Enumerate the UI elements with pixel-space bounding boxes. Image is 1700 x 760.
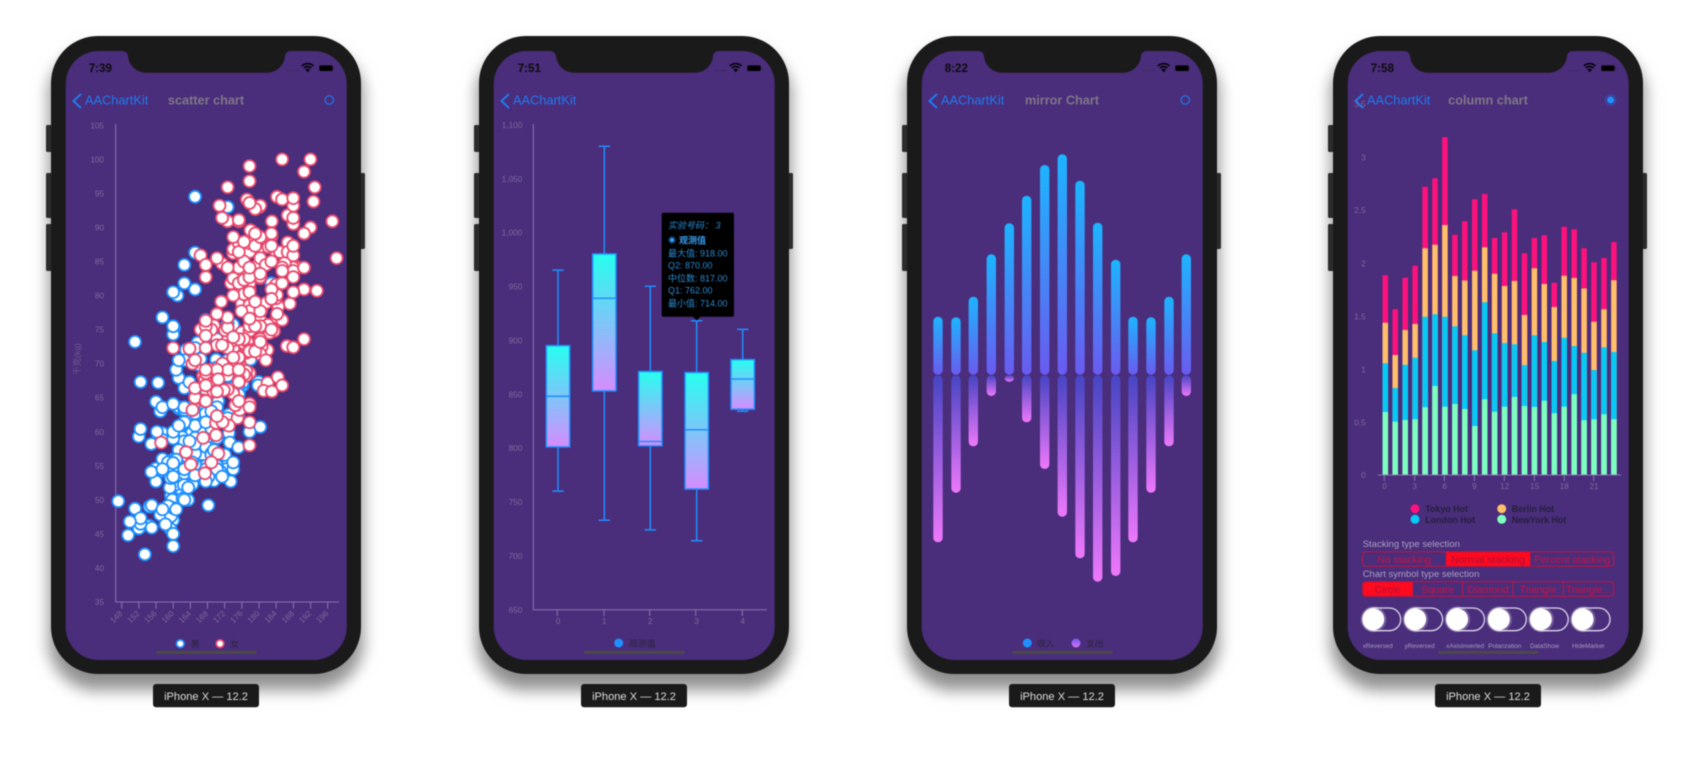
column x-axis [1378,475,1621,481]
status time 4: 7:58 [1371,62,1394,75]
column x-axis labels: 18 [1560,482,1569,491]
series: Berlin Hot [1385,225,1614,475]
segmented control: symbol: Square [1421,585,1455,596]
scatter x-axis labels: 160 [160,609,176,625]
segmented control: stacking: Normal stacking [1451,555,1525,566]
boxplot y-axis labels: 650 [509,606,523,615]
series: NewYork Hot [1385,386,1614,475]
toggle labels: xReversed [1363,643,1393,650]
scatter y-axis labels: 60 [95,428,104,437]
scatter y-axis labels: 105 [90,121,104,130]
boxplot y-axis labels: 900 [509,337,523,346]
phone 3: mirror chart [883,26,1241,712]
mirror legend [1023,638,1104,648]
phone 4: column chart [1309,26,1667,712]
tooltip: 中位数: 817.00 [668,272,728,284]
scatter y-axis title: 千克(kg) [72,343,82,375]
heading: stacking type: Stacking type selection [1363,539,1460,550]
tooltip: 最大值: 918.00 [668,248,728,258]
boxplot x-axis labels [556,617,745,626]
column y-axis labels [1354,100,1366,480]
heading: symbol type: Chart symbol type selection [1363,569,1479,580]
mirror legend: 收入 [1037,638,1055,648]
segmented control: symbol [1363,582,1614,596]
scatter y-axis labels: 70 [95,360,104,369]
scatter x-axis labels: 156 [143,609,159,625]
mirror upper bars [933,154,1191,375]
column x-axis labels [1382,482,1599,491]
column x-axis labels: 9 [1472,482,1477,491]
device frame 4 [1309,26,1667,712]
boxplot x-axis labels: 2 [648,617,653,626]
boxplot y-axis labels: 1,000 [502,229,523,238]
nav radio icon 3 [1181,96,1190,104]
boxplot y-axis labels: 950 [509,283,523,292]
scatter legend: 男 [191,639,200,649]
box 0 [546,270,570,491]
scatter axes [116,124,339,609]
tooltip: 实验号码： 3 [668,220,721,230]
toggle labels [1363,643,1605,650]
column x-axis labels: 21 [1589,482,1599,491]
column legend: NewYork Hot [1512,515,1566,525]
nav back label 3: AAChartKit [941,92,1005,107]
scatter series: blue points [112,191,277,560]
column y-axis labels: 1.5 [1354,313,1366,322]
scatter y-axis labels: 95 [95,189,104,198]
column legend: London Hot [1425,515,1475,525]
series: Tokyo Hot [1385,137,1614,475]
scatter x-axis labels: 176 [229,609,245,625]
scatter x-axis labels: 192 [297,609,314,625]
boxplot legend [614,638,656,648]
column y-axis labels: 2.5 [1354,206,1366,215]
scatter y-axis labels: 90 [95,224,104,232]
scatter y-axis labels: 75 [95,326,104,335]
device tag 4: iPhone X — 12.2 [1446,691,1530,703]
scatter legend: 女 [230,638,239,649]
segmented control: stacking: Percent stacking [1534,555,1610,566]
scatter y-axis labels: 55 [95,462,104,471]
boxplot x-axis labels: 3 [694,617,699,626]
scatter x-axis labels: 184 [263,609,279,625]
phone 2: box plot [455,26,813,712]
scatter y-axis labels: 80 [95,292,104,301]
nav back label 1: AAChartKit [85,92,149,107]
scatter y-axis labels: 50 [95,496,104,505]
column y-axis labels: 1 [1361,365,1366,374]
boxplot y-axis labels: 850 [509,391,523,400]
scatter series: red points [155,153,343,479]
boxplot axes [533,124,767,616]
stacked columns [1385,137,1614,475]
device tag 2: iPhone X — 12.2 [592,691,676,703]
tooltip [662,213,734,320]
tooltip: Q1: 762.00 [668,286,713,296]
column x-axis labels: 3 [1412,482,1417,491]
device frame 3 [883,26,1241,712]
nav radio icon 4 [1606,95,1616,105]
column x-axis labels: 0 [1382,482,1387,491]
column x-axis labels: 12 [1500,482,1510,491]
device tag 1 [153,684,259,707]
status time 2: 7:51 [518,62,541,75]
scatter y-axis labels: 85 [95,258,104,266]
device tag 2 [581,684,687,707]
box 1 [593,146,616,520]
segmented control: symbol: Triangle [1520,585,1557,596]
toggle labels: yReversed [1405,643,1435,650]
scatter y-axis labels: 40 [95,564,104,573]
box series [546,146,754,541]
box 2 [639,286,662,530]
device tag 4 [1435,684,1541,707]
segmented control: stacking [1363,552,1614,566]
device frame 2 [455,26,813,712]
scatter legend [176,638,239,649]
column y-axis labels: 0 [1361,471,1366,480]
tooltip: Q2: 870.00 [668,260,713,270]
phone 1: scatter chart [27,26,385,712]
boxplot y-axis labels [502,121,523,615]
column x-axis labels: 6 [1442,482,1447,491]
scatter y-axis labels: 35 [95,598,104,607]
segmented control: symbol: Diamond [1467,585,1509,596]
boxplot legend: 观测值 [629,638,656,648]
column legend: Tokyo Hot [1425,504,1468,514]
boxplot y-axis labels: 1,050 [502,175,523,184]
nav back label 4: AAChartKit [1367,92,1431,107]
nav title 4: column chart [1448,93,1529,107]
status time 3: 8:22 [945,62,968,75]
box 4 [731,329,754,411]
scatter x-axis labels: 148 [108,609,125,625]
scatter x-axis labels: 172 [211,609,228,625]
boxplot y-axis labels: 750 [509,498,523,507]
boxplot y-axis labels: 700 [509,552,523,561]
series: London Hot [1385,302,1614,475]
nav title 1: scatter chart [168,93,245,107]
scatter y-axis labels: 65 [95,394,104,403]
scatter x-axis labels: 152 [126,609,142,625]
nav title 3: mirror Chart [1025,93,1100,107]
scatter x-axis labels [108,609,331,625]
scatter x-axis labels: 164 [177,609,193,625]
device tag 3 [1009,684,1115,707]
column y-axis labels: 0.5 [1354,418,1366,427]
mirror legend: 支出 [1086,638,1104,648]
boxplot x-axis labels: 1 [602,617,607,626]
nav back label 2: AAChartKit [513,92,577,107]
boxplot y-axis labels: 800 [509,444,523,453]
scatter x-axis labels: 168 [194,609,211,625]
scatter x-axis labels: 188 [280,609,296,625]
toggle labels: DataShow [1530,643,1560,650]
segmented control: stacking: No stacking [1377,555,1431,566]
column legend [1410,504,1566,525]
toggle labels: HideMarker [1572,643,1605,650]
box 3 [685,321,708,541]
scatter x-axis labels: 196 [314,609,331,625]
mirror lower bars [933,375,1191,582]
column x-axis labels: 15 [1530,482,1540,491]
column y-axis labels: 3 [1361,153,1366,162]
scatter y-axis labels [90,121,104,607]
column legend: Berlin Hot [1512,504,1554,514]
device frame 1 [27,26,385,712]
toggle labels: Polarization [1488,643,1522,650]
column y-axis labels: 3.5 [1354,100,1366,109]
nav radio icon 1 [325,96,333,104]
toggle labels: xAxisInverted [1446,643,1485,650]
scatter y-axis labels: 45 [95,530,104,539]
column y-axis labels: 2 [1361,259,1366,268]
tooltip: 最小值: 714.00 [668,298,728,308]
boxplot x-axis labels: 0 [556,617,561,626]
device tag 3: iPhone X — 12.2 [1020,691,1104,703]
status time 1: 7:39 [89,62,112,75]
boxplot y-axis labels: 1,100 [502,121,523,130]
boxplot x-axis labels: 4 [740,617,745,626]
segmented control: symbol: Circle [1375,585,1401,596]
segmented control: symbol: Triangle... [1566,585,1611,596]
toggle switches [1360,606,1610,632]
device tag 1: iPhone X — 12.2 [164,691,248,703]
scatter x-axis labels: 180 [246,609,262,625]
tooltip: 观测值 [679,234,706,246]
scatter y-axis labels: 100 [90,155,104,164]
